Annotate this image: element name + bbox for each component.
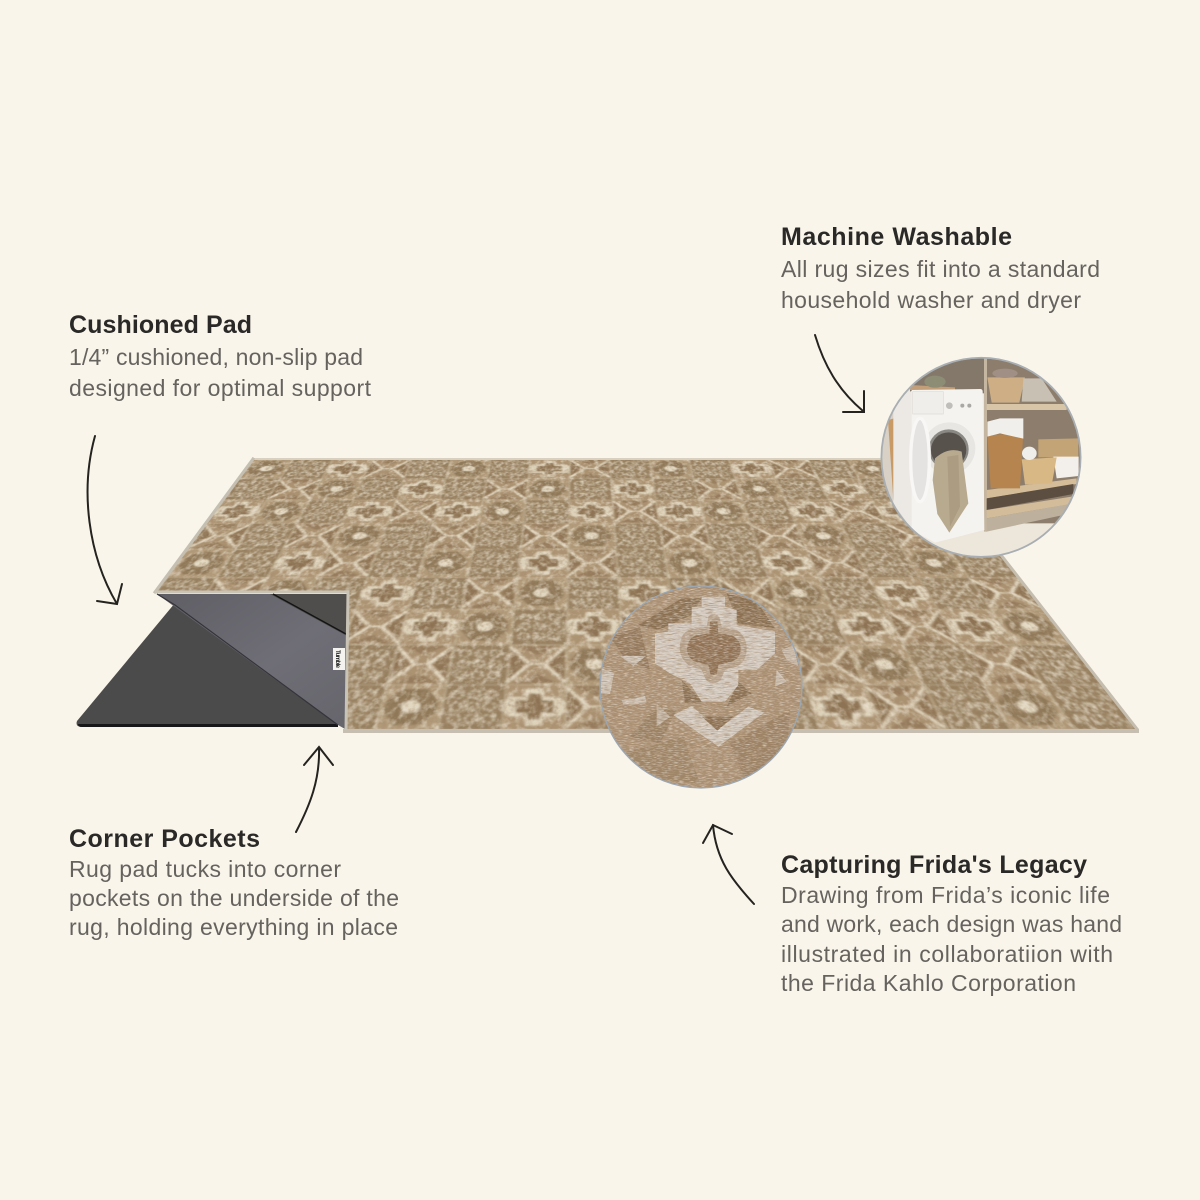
light chevron (673, 706, 764, 747)
rug sample in washer (933, 450, 968, 533)
arrow: cushioned pad (88, 436, 122, 604)
baskets (987, 377, 1025, 403)
text: machine washable (781, 223, 1100, 313)
arrow: corner pockets (296, 747, 333, 832)
text: cushioned pad: designed for optimal support (69, 375, 372, 401)
rug surface with patterned tiles (158, 460, 1135, 729)
text: machine washable: Machine Washable (781, 223, 1012, 251)
folded rug underside (155, 592, 348, 730)
care label on underside (333, 648, 345, 670)
text: capturing frida's legacy: Drawing from Frida’s iconic life (781, 882, 1110, 908)
text: capturing frida's legacy (781, 851, 1122, 996)
text: corner pockets (69, 825, 399, 940)
shelves (987, 404, 1067, 410)
rug border edges (155, 459, 1137, 731)
text: corner pockets: Rug pad tucks into corner (69, 856, 341, 882)
text: corner pockets: pockets on the underside of the (69, 885, 399, 911)
text: machine washable: All rug sizes fit into a standard (781, 256, 1100, 282)
darker weave patches (610, 593, 790, 783)
circular inset: washing machine (880, 357, 1083, 560)
circular inset: rug texture close-up (600, 586, 803, 789)
text: cushioned pad: 1/4” cushioned, non-slip pad (69, 344, 363, 370)
washing machine body (893, 389, 984, 543)
text: capturing frida's legacy: the Frida Kahlo Corporation (781, 970, 1076, 996)
cushioned rug pad (77, 603, 338, 727)
text: capturing frida's legacy: and work, each design was hand (781, 911, 1122, 937)
text: capturing frida's legacy: illustrated in collaboratiion with (781, 941, 1113, 967)
light medallion cross (655, 597, 775, 702)
care label on underside: Tumble (334, 650, 340, 669)
text: cushioned pad: Cushioned Pad (69, 311, 252, 339)
text: cushioned pad (69, 311, 372, 401)
text: capturing frida's legacy: Capturing Frida's Legacy (781, 851, 1087, 879)
text: corner pockets: Corner Pockets (69, 825, 260, 853)
arrow: frida's legacy (703, 825, 754, 904)
arrow: machine washable (815, 335, 864, 412)
text: corner pockets: rug, holding everything in place (69, 914, 398, 940)
text: machine washable: household washer and dryer (781, 287, 1081, 313)
